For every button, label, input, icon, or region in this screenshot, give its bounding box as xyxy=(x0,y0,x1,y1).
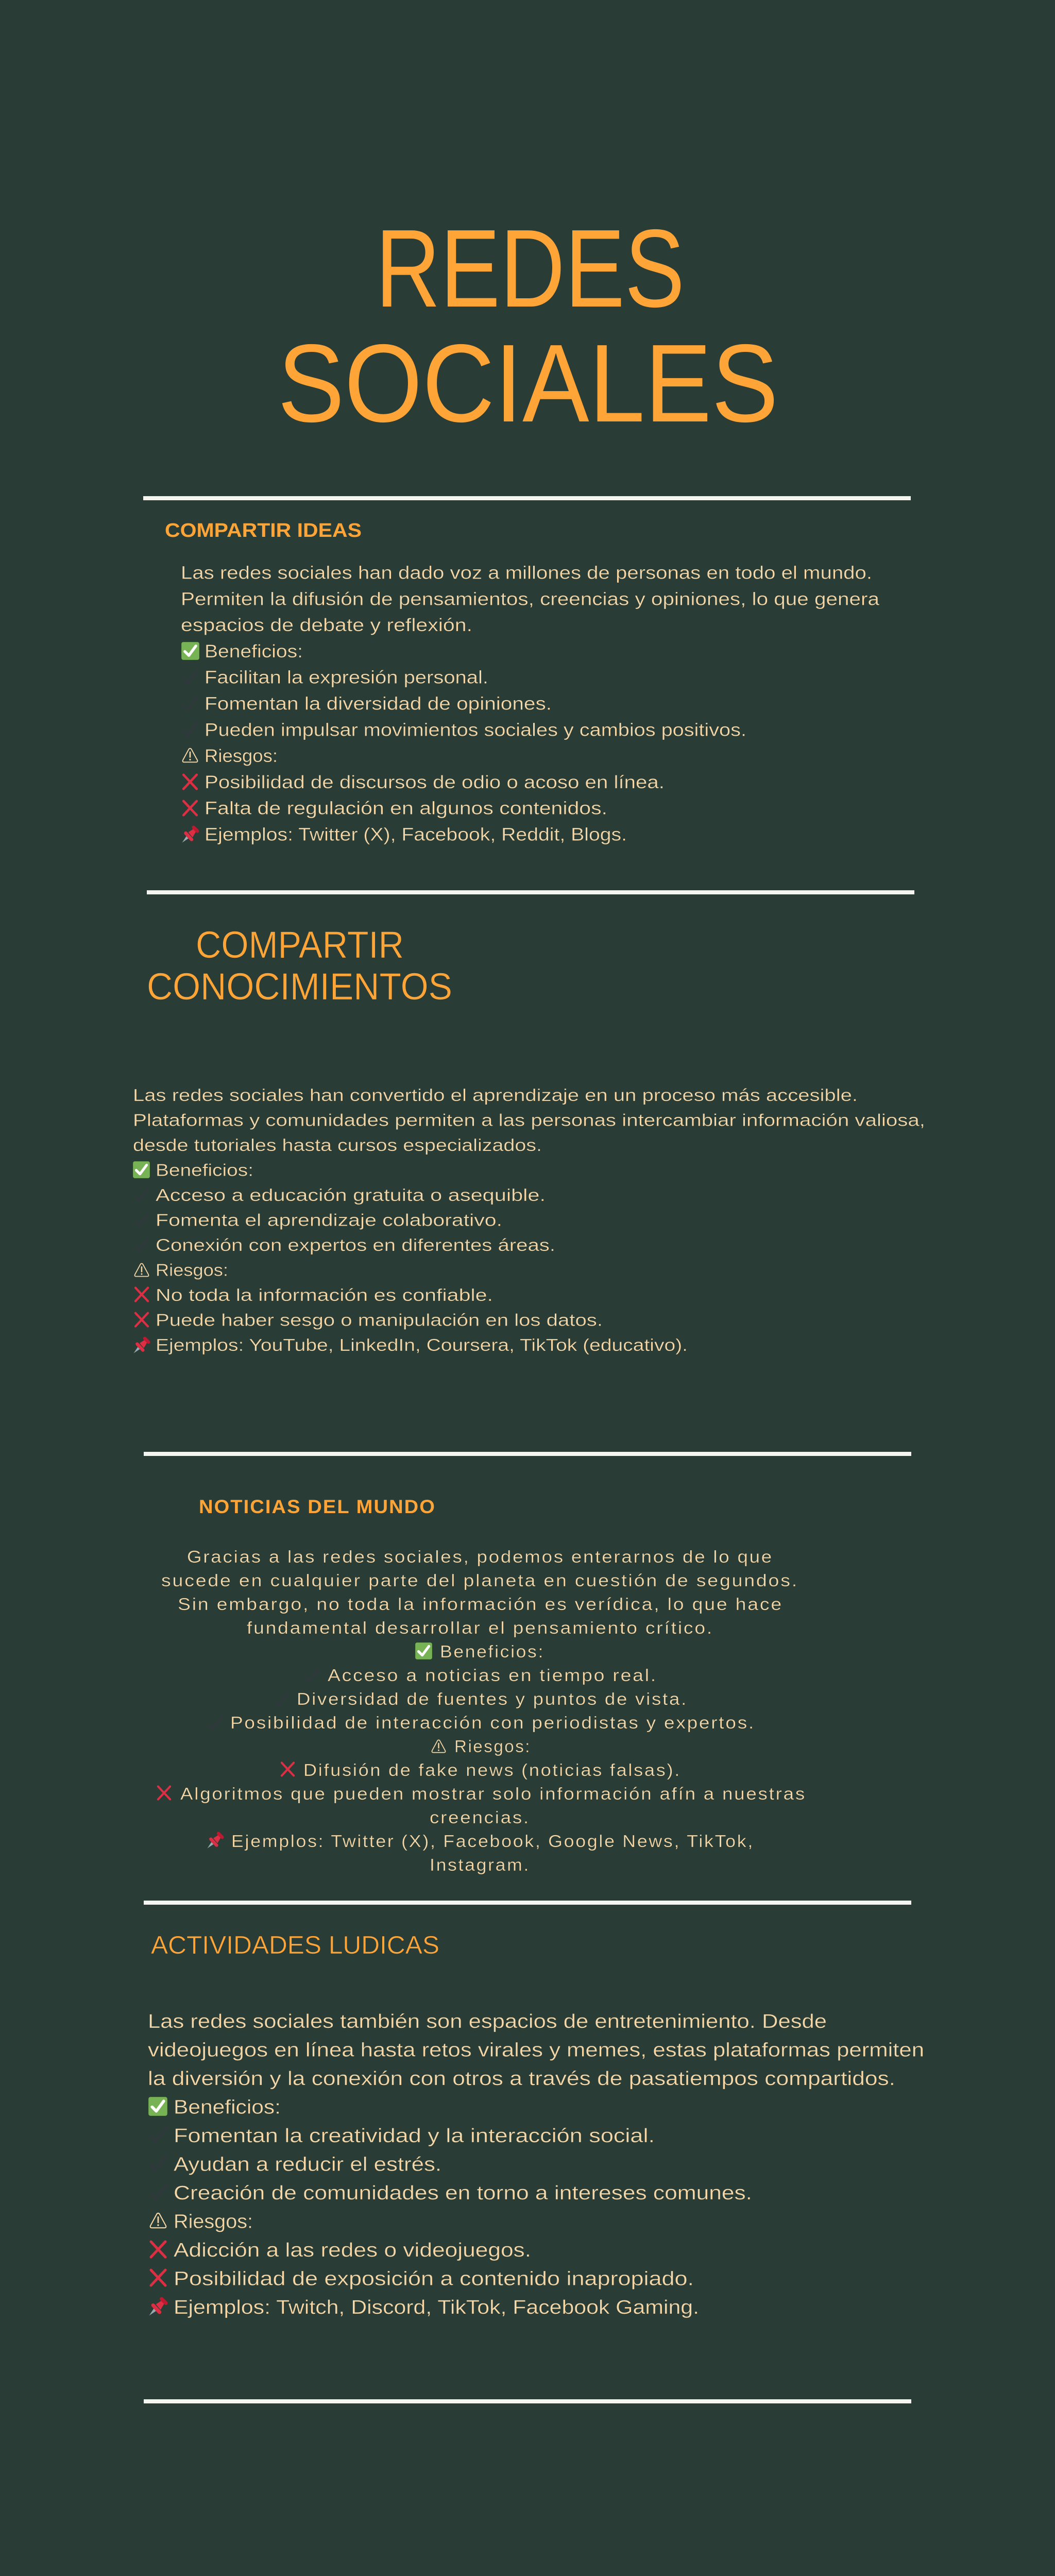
risks list xyxy=(183,746,665,819)
benefits list: Acceso a educación gratuita o asequible. xyxy=(156,1185,546,1205)
text block: intro: Las redes sociales han dado voz a millones de personas en todo el mundo. xyxy=(181,563,872,583)
text block: intro xyxy=(161,1547,798,1637)
title: REDES xyxy=(376,206,685,330)
risks list xyxy=(158,1737,806,1827)
examples: Ejemplos: Twitter (X), Facebook, Reddit, Blogs. xyxy=(205,824,627,845)
benefits list: Ayudan a reducir el estrés. xyxy=(174,2154,441,2175)
risks list: Puede haber sesgo o manipulación en los datos. xyxy=(156,1311,603,1329)
risks list: creencias. xyxy=(430,1808,530,1827)
examples: Ejemplos: Twitch, Discord, TikTok, Facebook Gaming. xyxy=(174,2297,699,2318)
benefits list: Diversidad de fuentes y puntos de vista. xyxy=(297,1689,688,1708)
examples: Ejemplos: Twitter (X), Facebook, Google News, TikTok, xyxy=(231,1832,754,1851)
heading: compartir ideas: COMPARTIR IDEAS xyxy=(165,520,362,541)
benefits list: Beneficios: xyxy=(174,2097,281,2119)
title: SOCIALES xyxy=(278,321,778,445)
examples: Instagram. xyxy=(430,1855,530,1874)
benefits list: Creación de comunidades en torno a intereses comunes. xyxy=(174,2182,752,2204)
text block: intro: fundamental desarrollar el pensamiento crítico. xyxy=(247,1618,713,1637)
benefits list xyxy=(148,2097,752,2204)
text block: intro: videojuegos en línea hasta retos virales y memes, estas plataformas permiten xyxy=(148,2039,924,2061)
risks list xyxy=(135,1260,603,1329)
benefits list xyxy=(133,1160,555,1255)
benefits list: Beneficios: xyxy=(440,1642,544,1661)
panel: compartir conocimientos xyxy=(133,924,925,1354)
heading: compartir conocimientos: CONOCIMIENTOS xyxy=(147,966,452,1008)
benefits list: Beneficios: xyxy=(205,641,303,662)
text block: intro: Las redes sociales también son espacios de entretenimiento. Desde xyxy=(148,2011,827,2032)
text block: intro xyxy=(181,563,880,635)
benefits list: Fomentan la diversidad de opiniones. xyxy=(205,693,552,714)
title xyxy=(278,206,778,445)
heading: actividades ludicas: ACTIVIDADES LUDICAS xyxy=(151,1931,439,1959)
benefits list: Fomentan la creatividad y la interacción social. xyxy=(174,2125,655,2147)
risks list: No toda la información es confiable. xyxy=(156,1285,493,1304)
text block: intro xyxy=(133,1086,925,1155)
risks list: Algoritmos que pueden mostrar solo información afín a nuestras xyxy=(180,1784,806,1803)
benefits list: Facilitan la expresión personal. xyxy=(205,668,488,688)
text block: intro: Las redes sociales han convertido el aprendizaje en un proceso más accesible. xyxy=(133,1086,858,1105)
risks list: Falta de regulación en algunos contenidos. xyxy=(205,799,607,819)
risks list: Difusión de fake news (noticias falsas). xyxy=(303,1760,681,1780)
benefits list: Conexión con expertos en diferentes áreas. xyxy=(156,1235,555,1255)
risks list: Adicción a las redes o videojuegos. xyxy=(174,2240,531,2261)
text block: intro: la diversión y la conexión con otros a través de pasatiempos compartidos. xyxy=(148,2068,895,2090)
heading: noticias del mundo: NOTICIAS DEL MUNDO xyxy=(199,1496,436,1517)
panel: actividades ludicas xyxy=(148,1931,924,2318)
heading: compartir conocimientos: COMPARTIR xyxy=(196,924,404,966)
risks list: Riesgos: xyxy=(156,1260,228,1280)
examples xyxy=(207,1832,754,1874)
risks list: Riesgos: xyxy=(174,2211,253,2233)
text block: intro xyxy=(148,2011,924,2090)
text block: intro: desde tutoriales hasta cursos especializados. xyxy=(133,1136,542,1155)
risks list: Riesgos: xyxy=(454,1737,531,1756)
benefits list xyxy=(209,1642,755,1732)
benefits list xyxy=(181,641,746,740)
heading: compartir conocimientos xyxy=(147,924,452,1008)
text block: intro: sucede en cualquier parte del planeta en cuestión de segundos. xyxy=(161,1571,798,1590)
text block: intro: Permiten la difusión de pensamientos, creencias y opiniones, lo que genera xyxy=(181,589,880,609)
risks list: Posibilidad de discursos de odio o acoso en línea. xyxy=(205,772,665,792)
panel: compartir ideas xyxy=(165,520,880,845)
examples: Ejemplos: YouTube, LinkedIn, Coursera, TikTok (educativo). xyxy=(156,1335,688,1354)
panel: noticias del mundo xyxy=(158,1496,806,1874)
benefits list: Fomenta el aprendizaje colaborativo. xyxy=(156,1211,502,1229)
benefits list: Beneficios: xyxy=(156,1160,253,1180)
risks list xyxy=(150,2211,694,2290)
benefits list: Acceso a noticias en tiempo real. xyxy=(328,1666,657,1685)
risks list: Posibilidad de exposición a contenido inapropiado. xyxy=(174,2268,694,2290)
text block: intro: Plataformas y comunidades permiten a las personas intercambiar información valiosa, xyxy=(133,1111,925,1129)
text block: intro: Gracias a las redes sociales, podemos enterarnos de lo que xyxy=(187,1547,773,1566)
benefits list: Pueden impulsar movimientos sociales y cambios positivos. xyxy=(205,720,746,740)
text block: intro: Sin embargo, no toda la información es verídica, lo que hace xyxy=(178,1595,783,1614)
text block: intro: espacios de debate y reflexión. xyxy=(181,615,472,635)
risks list: Riesgos: xyxy=(205,746,278,766)
benefits list: Posibilidad de interacción con periodistas y expertos. xyxy=(230,1713,755,1732)
